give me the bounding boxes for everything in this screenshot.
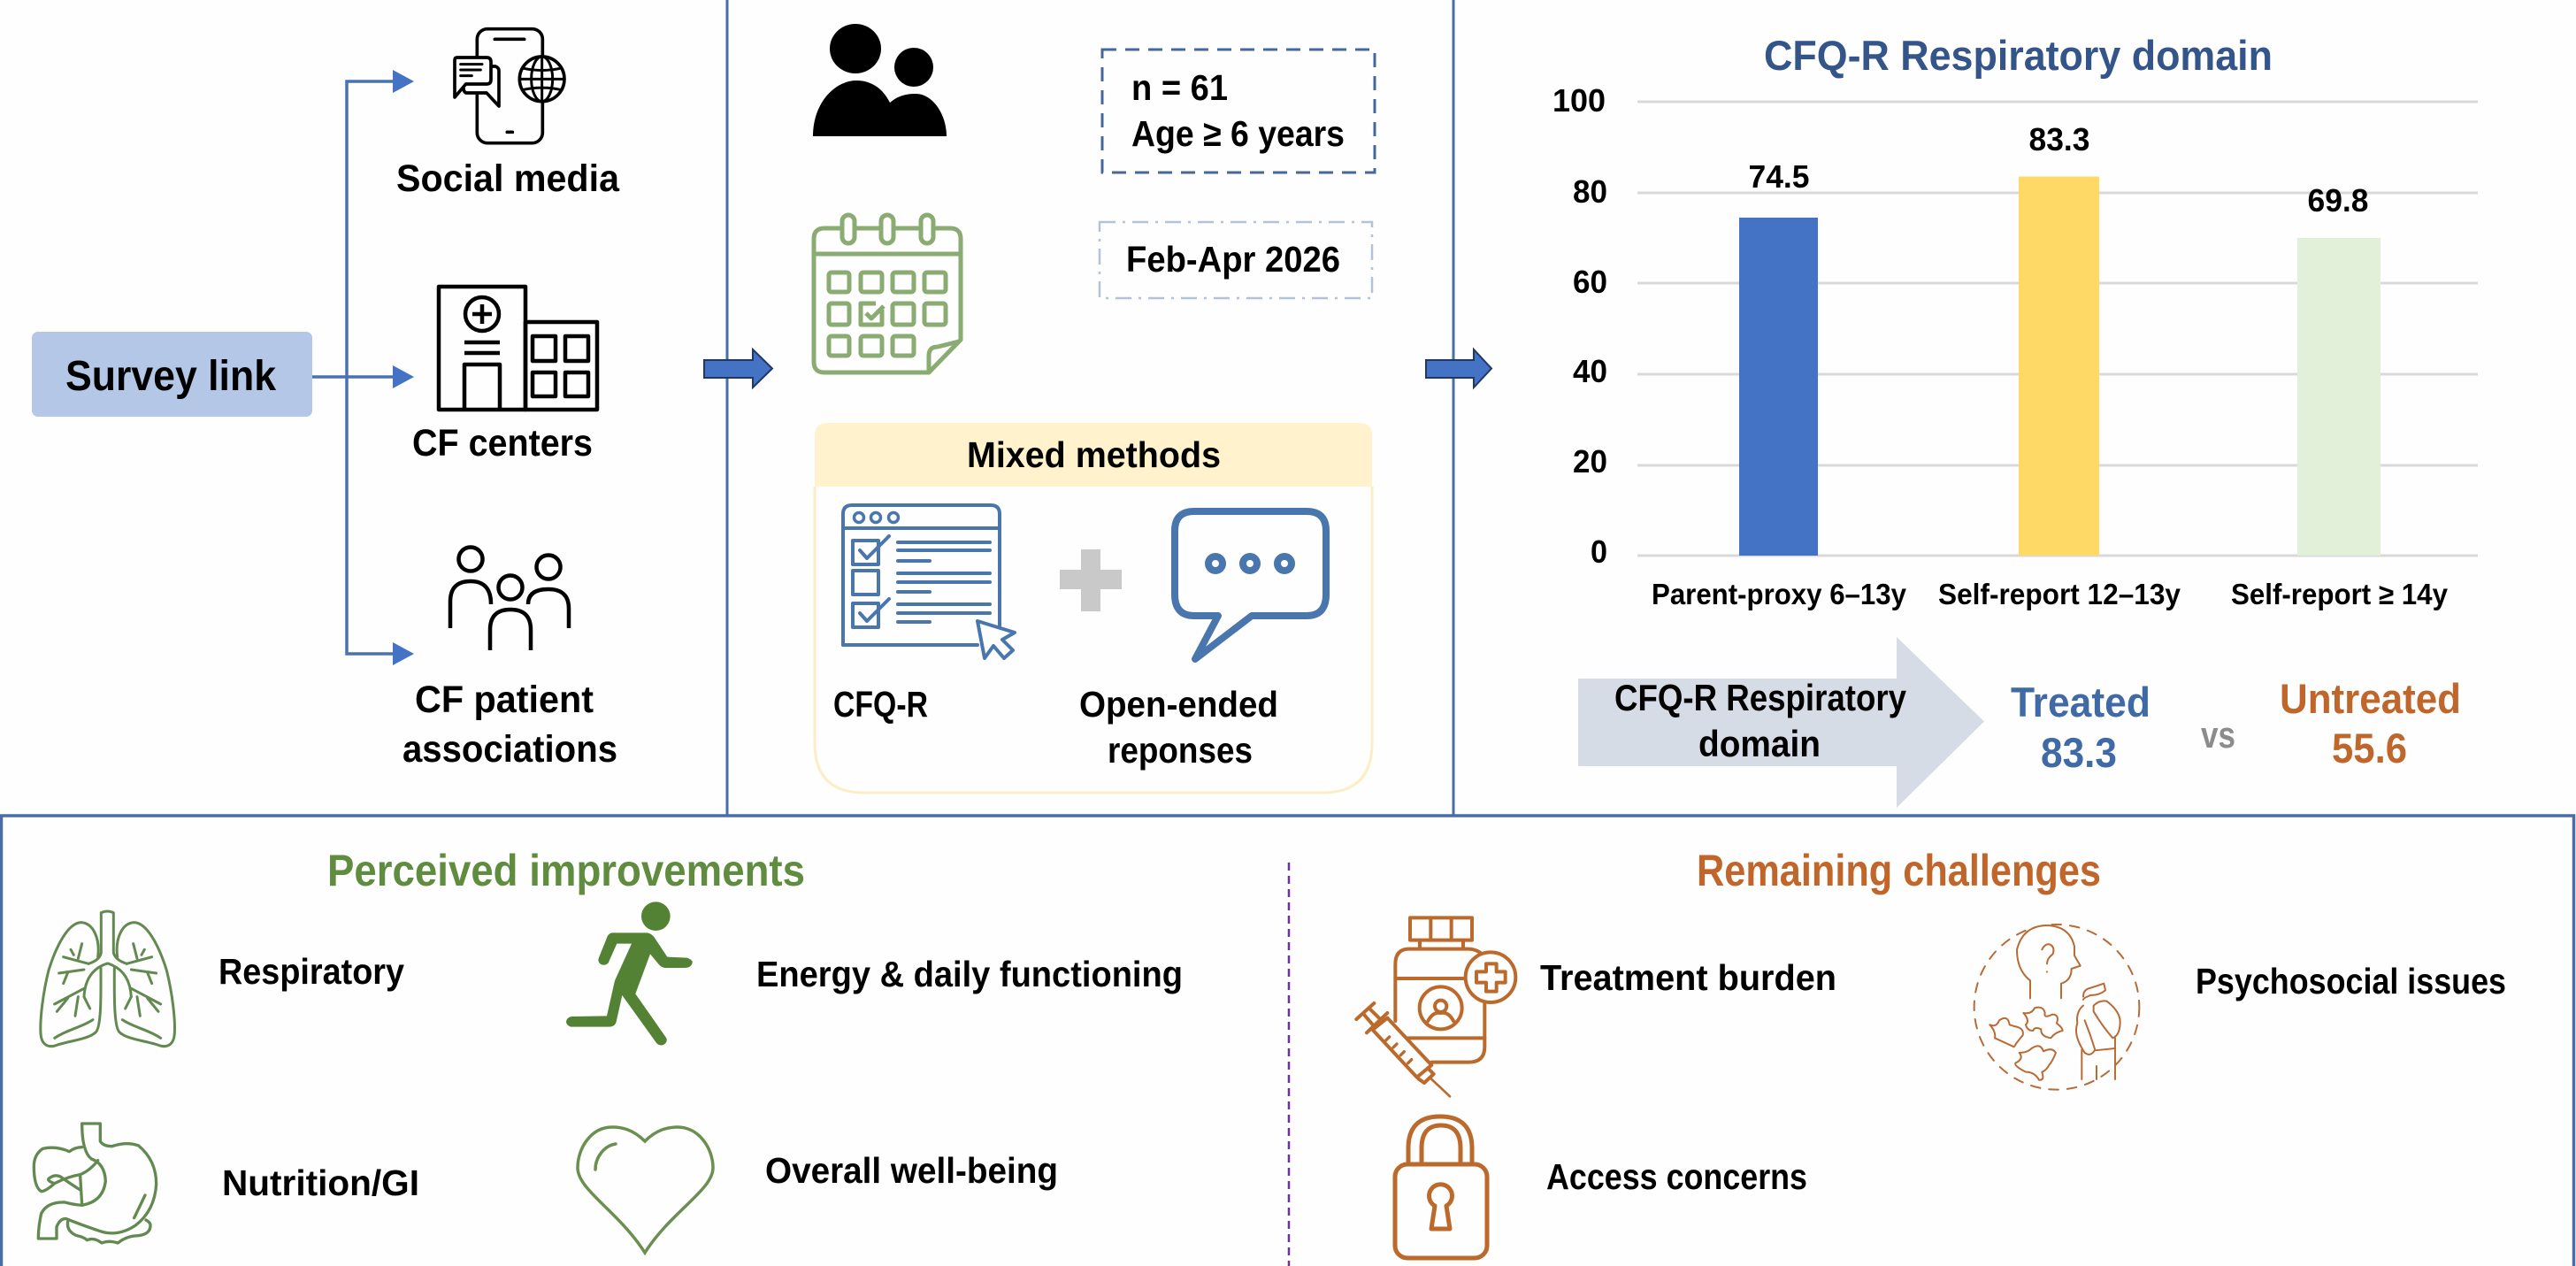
callout: sample size and age: Age ≥ 6 years: [1131, 113, 1345, 154]
icon: phone with chat and globe: [455, 29, 564, 143]
arrow: CFQ-R respiratory domain: CFQ-R Respiratory: [1614, 677, 1907, 718]
chart title: CFQ-R Respiratory domain: [1764, 32, 2273, 79]
category labels: Self-report 12–13y: [1938, 578, 2181, 610]
arrow: CFQ-R respiratory domain: [1578, 637, 1984, 808]
bar: parent-proxy 74.5: [1739, 218, 1818, 556]
category labels: Parent-proxy 6–13y: [1652, 578, 1907, 610]
panel: mixed methods: [815, 423, 1372, 793]
icon: padlock: [1395, 1116, 1487, 1258]
y axis labels: 20: [1573, 443, 1607, 480]
icon: stomach: [34, 1124, 157, 1243]
value labels: 69.8: [2307, 182, 2369, 219]
bar: self-report 14y+ 69.8: [2297, 238, 2380, 556]
icon: plus sign: [1060, 549, 1122, 611]
comparison: untreated score: [2280, 675, 2461, 771]
panel: results: [1552, 32, 2478, 808]
arrow: CFQ-R respiratory domain: domain: [1698, 723, 1821, 764]
icon: participants silhouette: [813, 24, 947, 136]
comparison: treated score: [2011, 679, 2150, 776]
label: treatment burden: Treatment burden: [1540, 957, 1836, 998]
icon: survey form with cursor: [843, 505, 1015, 658]
category labels: [1652, 578, 2449, 610]
y axis labels: 80: [1573, 173, 1607, 210]
label: CF patient associations: [402, 679, 617, 771]
heading: perceived improvements: Perceived improvements: [327, 846, 805, 895]
comparison: treated score: 83.3: [2041, 729, 2117, 776]
y axis labels: 60: [1573, 264, 1607, 300]
callout: sample size and age: [1102, 50, 1375, 173]
label: energy and daily functioning: Energy & daily functioning: [756, 954, 1183, 994]
label: nutrition and GI: Nutrition/GI: [222, 1162, 419, 1203]
branching connector arrows: [312, 70, 414, 665]
label: CF patient associations: CF patient: [415, 679, 594, 721]
comparison: treated score: Treated: [2011, 679, 2150, 725]
label: CFQ-R: CFQ-R: [833, 684, 928, 725]
bar: self-report 12-13y 83.3: [2019, 177, 2099, 556]
label: CF patient associations: associations: [402, 728, 617, 771]
icon: lungs: [41, 911, 174, 1047]
label: open-ended responses: [1079, 684, 1278, 771]
value labels: 83.3: [2029, 121, 2089, 157]
category labels: Self-report ≥ 14y: [2231, 578, 2449, 610]
label: access concerns: Access concerns: [1546, 1156, 1807, 1197]
icon: heart: [578, 1127, 713, 1253]
callout: study period: [1100, 222, 1372, 298]
label: psychosocial issues: Psychosocial issues: [2196, 961, 2506, 1001]
y axis labels: 40: [1573, 353, 1607, 389]
panel divider: recruitment / design: [725, 0, 729, 816]
callout: study period: Feb-Apr 2026: [1126, 239, 1340, 280]
icon: hospital building: [439, 287, 597, 410]
value labels: [1748, 121, 2369, 219]
label: vs: vs: [2201, 714, 2235, 756]
icon: running person: [566, 902, 693, 1045]
y axis labels: 0: [1591, 533, 1607, 570]
panel: study design: [813, 24, 1375, 793]
icon: calendar: [814, 215, 961, 372]
label: CF centers: CF centers: [412, 422, 593, 464]
heading: remaining challenges: Remaining challenges: [1697, 846, 2101, 895]
label: open-ended responses: Open-ended: [1079, 684, 1278, 725]
icon: psychosocial head, puzzle and person: [1974, 925, 2139, 1090]
icon: speech bubble: [1175, 511, 1326, 659]
arrow: recruitment to design: [704, 349, 772, 387]
comparison: untreated score: 55.6: [2332, 725, 2407, 771]
callout: sample size and age: n = 61: [1131, 67, 1228, 108]
y axis labels: [1552, 82, 1607, 570]
bar chart: [1552, 82, 2478, 610]
label: open-ended responses: reponses: [1108, 730, 1253, 771]
label: social media: Social media: [396, 157, 620, 200]
y axis labels: 100: [1552, 82, 1606, 119]
label: overall well-being: Overall well-being: [765, 1150, 1058, 1191]
value labels: 74.5: [1748, 158, 1810, 195]
panel: qualitative findings: [2, 816, 2574, 1266]
survey link box: Survey link: [65, 353, 276, 400]
panel: mixed methods: Mixed methods: [967, 434, 1221, 475]
panel divider: design / results: [1453, 0, 1454, 816]
icon: group of three people: [450, 547, 569, 650]
comparison: untreated score: Untreated: [2280, 675, 2461, 722]
survey link box: [32, 332, 312, 417]
panel: recruitment: [32, 29, 620, 771]
label: respiratory: Respiratory: [218, 951, 404, 992]
icon: medicine bottle and syringe: [1356, 917, 1515, 1096]
arrow: design to results: [1426, 349, 1491, 387]
